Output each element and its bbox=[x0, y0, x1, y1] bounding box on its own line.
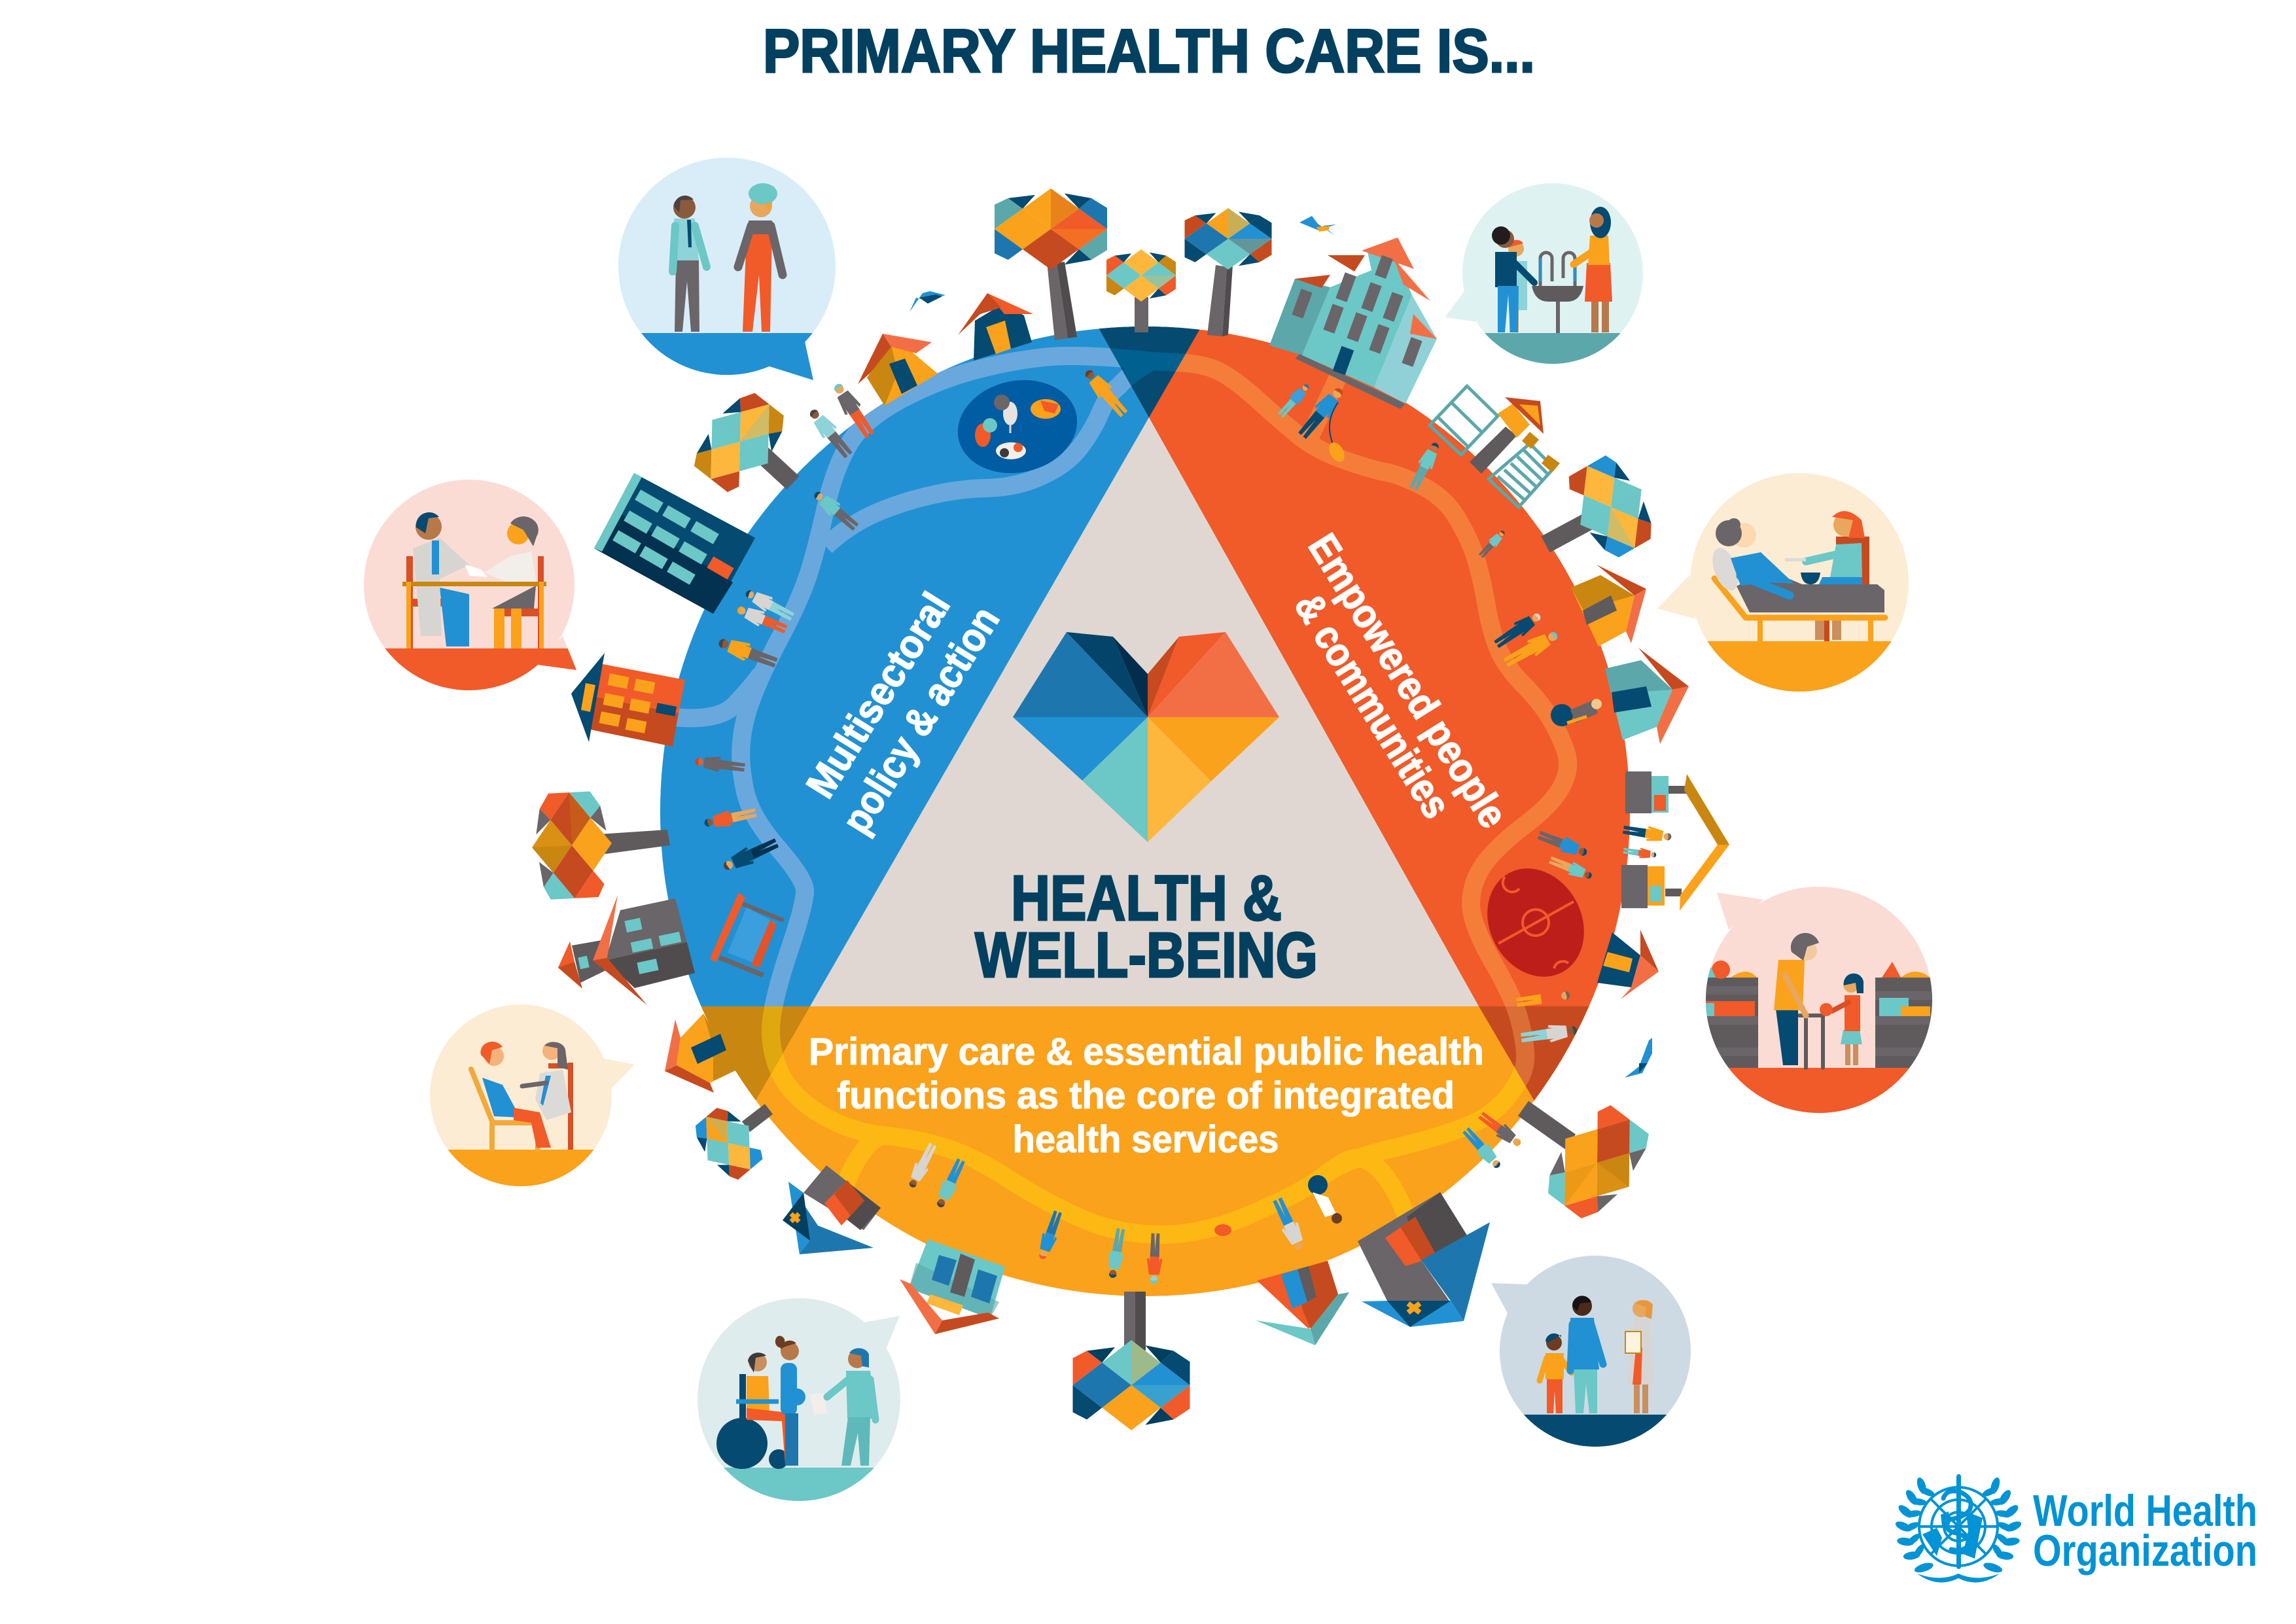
title: PRIMARY HEALTH CARE IS... bbox=[763, 16, 1535, 85]
figure: patient in bed bbox=[1716, 518, 1794, 595]
tree: upper left bbox=[683, 383, 797, 501]
globe: three overlapping sectors with roads and central triangle bbox=[660, 327, 1630, 1296]
heading: health and well-being bbox=[975, 862, 1318, 991]
bed frame on blue sector bbox=[710, 892, 785, 978]
small people walking around the globe bbox=[694, 366, 1672, 1284]
speech bubble: consultation, doctor and patient bbox=[425, 1004, 635, 1195]
house: grey with blue roof bottom right bbox=[1358, 1192, 1490, 1327]
overlap: top wedge bbox=[1099, 327, 1200, 417]
figure: patient bbox=[484, 516, 539, 648]
house: orange with teal roof bottom bbox=[1256, 1261, 1349, 1345]
pond with farm animals bbox=[949, 369, 1086, 484]
figure: adult washing hands bbox=[1492, 226, 1534, 332]
label: empowered people and communities: Empowered people bbox=[1299, 526, 1516, 836]
building: orange left bbox=[571, 653, 685, 747]
playground bbox=[1430, 386, 1560, 507]
bird: right bbox=[1625, 1038, 1652, 1078]
figure: pregnant woman bbox=[775, 1336, 805, 1466]
label: primary care and essential public health functions: functions as the core of integrated bbox=[837, 1074, 1455, 1117]
figure: patient seated bbox=[480, 1042, 551, 1148]
house: yellow lower left bbox=[665, 1014, 735, 1093]
figure: child with cap bbox=[1540, 1333, 1572, 1413]
sector: multisectoral policy (blue) bbox=[660, 327, 1200, 1006]
tree: lower left small bbox=[686, 1099, 771, 1187]
tree: top right bbox=[1184, 208, 1272, 336]
figure: child bbox=[1508, 240, 1527, 332]
house: yellow upper left bbox=[858, 334, 938, 406]
heading: health and well-being: HEALTH & bbox=[1011, 862, 1282, 934]
figure: carer with bowl bbox=[1785, 511, 1865, 584]
speech bubble: grandmother and child at market bbox=[1701, 887, 1941, 1127]
overlap: lower left bbox=[701, 1006, 810, 1101]
building: grey mosque left bbox=[558, 895, 695, 1005]
heart icon bbox=[1013, 632, 1279, 842]
figure: doctor bbox=[413, 512, 469, 646]
tree: upper right bbox=[1545, 448, 1665, 566]
figure: woman in hijab bbox=[1574, 207, 1612, 332]
speech bubble: carer feeding patient in bed bbox=[1657, 473, 1911, 700]
speech bubble: community handwashing bbox=[1445, 183, 1649, 372]
overlap: lower right bbox=[1479, 1006, 1589, 1101]
market crates right bbox=[1875, 962, 1941, 1068]
figure: man in tie bbox=[673, 196, 707, 332]
figure: health worker with clipboard bbox=[1625, 1300, 1654, 1413]
label: primary care and essential public health functions: Primary care & essential public health bbox=[809, 1031, 1484, 1073]
bird: top left bbox=[910, 291, 945, 312]
house: yellow right bbox=[1571, 565, 1646, 646]
house: small navy right bbox=[1597, 930, 1659, 999]
logo: World Health Organization wordmark bbox=[2033, 1486, 2257, 1576]
tree: lower right bbox=[1523, 1095, 1661, 1230]
building: teal apartments bbox=[1269, 238, 1437, 409]
figure: nurse bbox=[827, 1348, 877, 1466]
figure: wheelchair user bbox=[716, 1352, 798, 1469]
logo: World Health Organization emblem bbox=[1894, 1474, 2022, 1583]
tree: left bbox=[529, 790, 670, 900]
tree: bottom bbox=[1073, 1292, 1190, 1430]
market crates left bbox=[1701, 961, 1758, 1068]
speech bubble: wheelchair user, pregnant woman and nurse bbox=[694, 1298, 903, 1507]
tree: top small bbox=[1106, 249, 1176, 332]
central triangle edge: grey area already drawn bbox=[810, 417, 1479, 1006]
label: empowered people and communities: & communities bbox=[1286, 586, 1459, 826]
label: primary care and essential public health functions: health services bbox=[1013, 1118, 1279, 1161]
speech bubble: family and health worker bbox=[1491, 1256, 1695, 1454]
house: navy top bbox=[958, 293, 1033, 361]
football pitch bbox=[1469, 851, 1602, 994]
speech bubble: multisectoral policy, two men talking bbox=[609, 158, 836, 392]
house: grey with blue roof lower left bbox=[783, 1165, 881, 1254]
sector: primary care (yellow) bbox=[701, 1006, 1589, 1296]
building: teal with orange roof bottom left bbox=[900, 1239, 1005, 1334]
figure: parent bbox=[1569, 1296, 1603, 1413]
bird: top right bbox=[1299, 216, 1336, 236]
speech bubble: doctor and patient at table bbox=[360, 480, 582, 707]
market stall bbox=[1621, 771, 1729, 911]
label: primary care and essential public health functions bbox=[809, 1031, 1484, 1161]
house: teal right bbox=[1605, 648, 1689, 744]
prescription note bbox=[810, 1393, 827, 1415]
figure: girl with apple bbox=[1820, 974, 1863, 1065]
small figures: wheelchair users and dogs bbox=[1214, 402, 1602, 1236]
label: multisectoral policy and action: Multisectoral bbox=[798, 585, 959, 806]
house: navy office left bbox=[594, 473, 755, 614]
figure: doctor in white coat bbox=[522, 1042, 571, 1120]
heading: health and well-being: WELL-BEING bbox=[975, 919, 1318, 991]
figure: worker in overalls bbox=[738, 183, 783, 332]
label: multisectoral policy and action: policy & action bbox=[834, 599, 1008, 841]
tree: top large bbox=[995, 188, 1107, 340]
sector: empowered people (orange) bbox=[1099, 327, 1630, 1006]
figure: grandmother with walker bbox=[1774, 933, 1823, 1068]
